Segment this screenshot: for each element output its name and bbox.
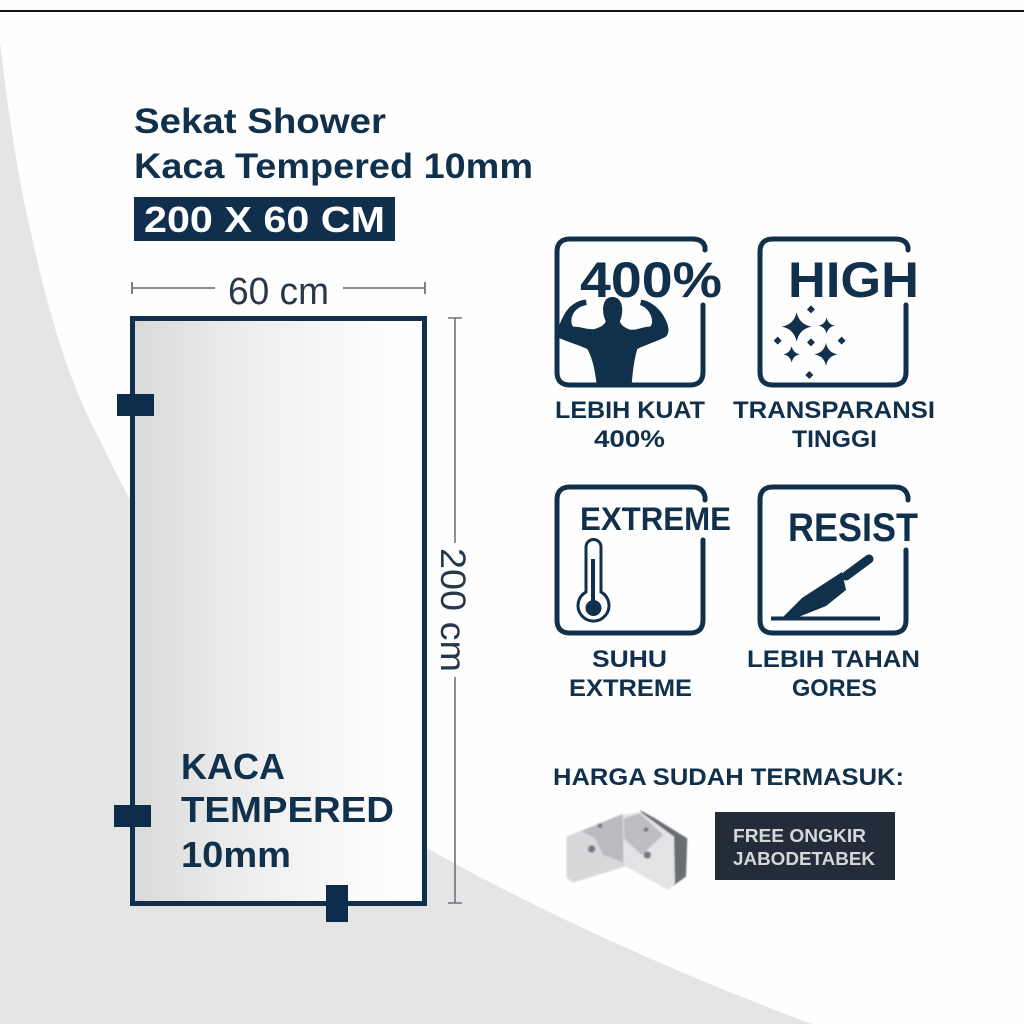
caption: TINGGI [792,426,877,453]
caption: EXTREME [569,675,692,702]
title: Kaca Tempered 10mm [134,147,533,186]
title: Sekat Shower [134,102,386,141]
feature: stronger 400% [555,239,722,453]
caption [747,646,920,702]
icon frame [760,487,908,633]
included heading: HARGA SUDAH TERMASUK: [553,764,904,791]
clip bottom [326,885,348,922]
caption: GORES [792,675,877,702]
glass pane [132,318,424,904]
big text EXTREME: EXTREME [580,501,731,537]
glass label: 10mm [181,834,291,875]
big text 400%: 400% [580,252,722,308]
icon frame [557,487,705,633]
icon: thermometer [578,540,609,621]
height dimension: 200 cm [433,318,472,903]
top border line [0,10,1024,12]
width dimension: 60 cm [132,271,425,313]
glass label: TEMPERED [181,789,394,830]
height dimension: 200 cm: 200 cm [433,548,472,672]
icon frame [557,239,705,385]
big text RESIST: RESIST [788,506,918,550]
caption: SUHU [592,646,667,673]
glass panel diagram [114,318,424,922]
icon: glass clamp bracket [567,810,687,890]
caption: LEBIH TAHAN [747,646,920,673]
clip top left [117,394,154,416]
feature: scratch resistant [747,487,920,702]
feature: extreme temperature [557,487,731,702]
free shipping badge [715,812,895,880]
caption: TRANSPARANSI [733,397,935,424]
clip bottom left [114,805,151,827]
size badge: 200 X 60 CM [144,199,385,240]
icon: flexing man [558,297,668,384]
feature: high transparency [733,239,935,453]
free shipping badge: JABODETABEK [733,849,875,869]
caption: LEBIH KUAT [555,397,705,424]
caption [569,646,692,702]
glass label: KACA [181,746,285,787]
icon: knife on surface [771,559,880,618]
icon frame [760,239,908,385]
width dimension: 60 cm: 60 cm [228,271,329,313]
glass label [181,746,394,875]
icon: sparkles [774,305,846,379]
caption [555,397,705,453]
free shipping badge: FREE ONGKIR [733,826,866,846]
caption: 400% [594,426,665,453]
title [134,102,533,186]
caption [733,397,935,453]
background grey curved shape [0,42,812,1024]
big text HIGH: HIGH [788,252,919,308]
